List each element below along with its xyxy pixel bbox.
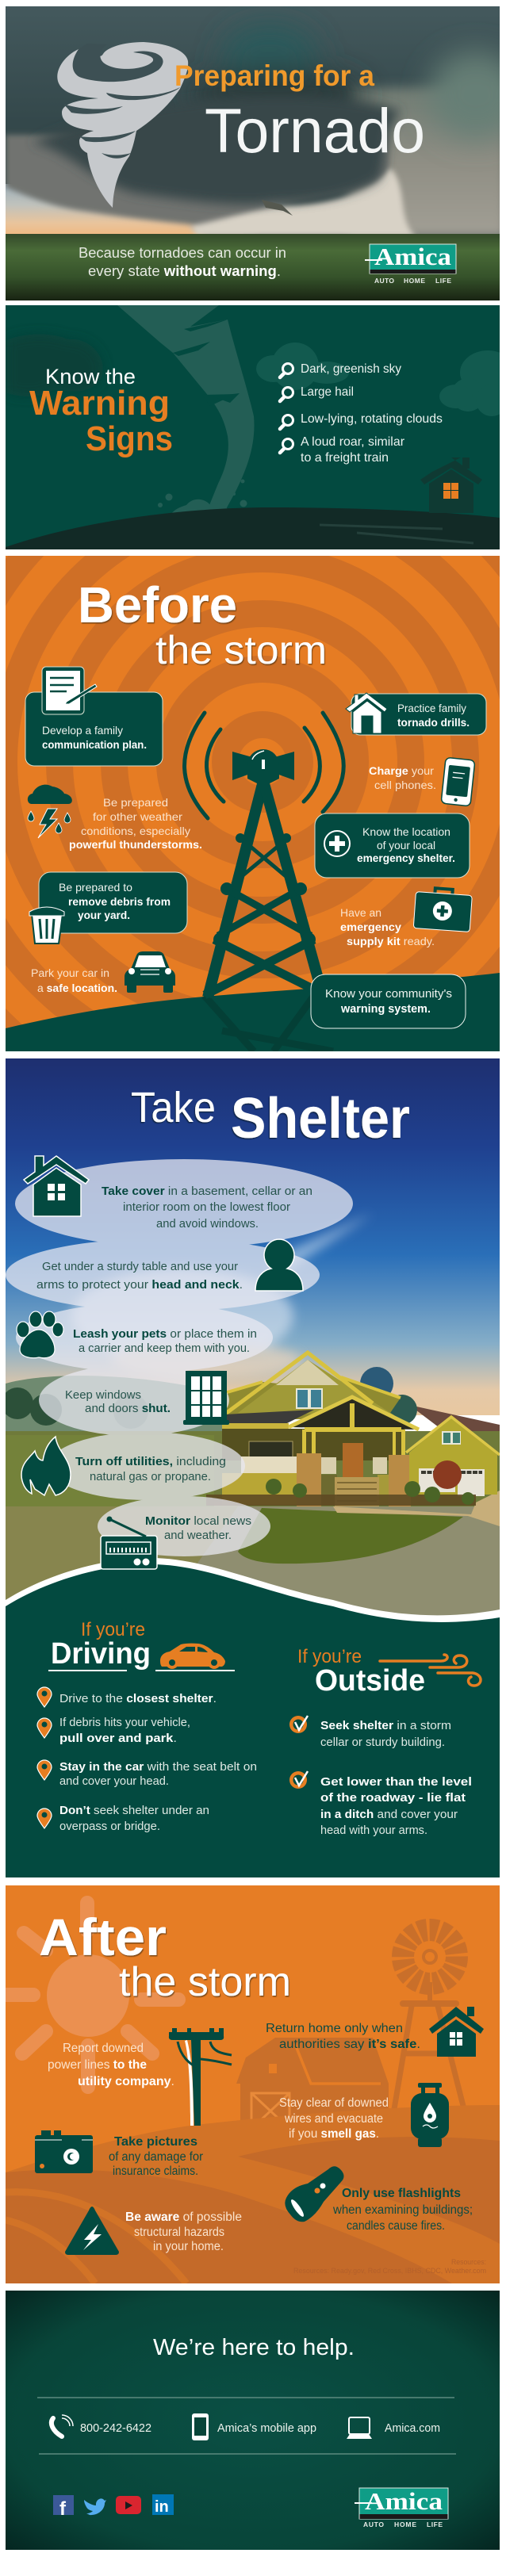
- list: driving tips: overpass or bridge.: [59, 1820, 160, 1833]
- callout: emergency shelter: Know the location: [362, 825, 450, 838]
- list: driving tips: Stay in the car with the seat belt on: [59, 1760, 257, 1774]
- heading: if you're outside: If you’re: [297, 1646, 362, 1667]
- icon: document and pen: [42, 667, 97, 714]
- text: take pictures: insurance claims.: [113, 2165, 198, 2178]
- icon: power pole: [169, 2028, 232, 2126]
- oval text: utilities: Turn off utilities, including: [75, 1455, 226, 1468]
- logo: Amica footer: AUTO: [363, 2520, 384, 2528]
- list: warning signs: [301, 362, 443, 465]
- icon: car: [125, 951, 175, 993]
- logo: Amica footer: Amica: [365, 2487, 443, 2515]
- callout: remove debris: Be prepared to: [59, 881, 132, 894]
- heading: if you're outside: [297, 1646, 425, 1698]
- hillside and trees: [6, 1376, 222, 1431]
- text: thunderstorms: Be prepared: [103, 796, 168, 809]
- callout: communication plan: Develop a family: [42, 724, 123, 737]
- text: emergency kit: emergency: [340, 921, 401, 933]
- icon: flashlight: [285, 2166, 344, 2222]
- text: smell gas: if you smell gas.: [289, 2127, 379, 2141]
- text: charge phones: [369, 764, 436, 791]
- heading: know the warning signs: Warning: [29, 384, 170, 423]
- oval text: take cover: [102, 1185, 312, 1231]
- text: emergency kit: supply kit ready.: [347, 935, 435, 947]
- resources note: [293, 2258, 486, 2275]
- list: driving tips: Drive to the closest shelter .: [59, 1692, 217, 1705]
- resources note: Resources:: [451, 2258, 486, 2266]
- callout: emergency shelter: [315, 813, 470, 878]
- text: return home: [266, 2022, 420, 2051]
- heading: if you're driving: If you’re: [81, 1619, 145, 1640]
- panel: take shelter: [2, 1058, 506, 1877]
- tornado silhouette: [117, 305, 254, 526]
- logo: Amica footer: LIFE: [427, 2520, 443, 2528]
- heading: after the storm: [39, 1908, 291, 2005]
- panel: hero storm photo: [6, 6, 506, 300]
- translucent ovals: [6, 1159, 353, 1556]
- icon: storm cloud: [28, 785, 72, 838]
- heading: here to help: We’re here to help.: [153, 2335, 355, 2360]
- oval text: monitor: [145, 1514, 251, 1542]
- text: emergency kit: [340, 906, 435, 947]
- list: outside tips: in a ditch and cover your: [320, 1808, 458, 1821]
- logo: Amica: Amica: [374, 243, 452, 270]
- icon: house: [429, 2007, 484, 2057]
- oval text: pets: [73, 1327, 257, 1355]
- list: outside tips: of the roadway - lie flat: [320, 1791, 466, 1805]
- subtitle: every state without warning.: [88, 263, 281, 279]
- list: outside tips: [320, 1719, 472, 1837]
- oval text: utilities: [75, 1455, 226, 1483]
- icon: laptop: [347, 2417, 372, 2439]
- text: structural hazards: structural hazards: [134, 2226, 224, 2239]
- callout: warning system: Know your community's: [325, 987, 452, 1001]
- heading: if you're outside: Outside: [315, 1664, 425, 1698]
- text: emergency kit: Have an: [340, 906, 381, 919]
- oval text: utilities: natural gas or propane.: [90, 1470, 211, 1483]
- text: flashlights: candles cause fires.: [347, 2219, 445, 2233]
- title: Tornado: [205, 95, 425, 166]
- sun: [2, 1903, 178, 2087]
- concentric signal rings: [6, 556, 500, 1028]
- oval text: pets: Leash your pets or place them in: [73, 1327, 257, 1341]
- icons: magnifiers: [280, 363, 293, 453]
- logo: Amica: [365, 243, 456, 285]
- heading: take shelter: Take: [131, 1084, 216, 1131]
- logo: Amica: AUTO: [374, 277, 394, 285]
- list: warning signs: Dark, greenish sky: [301, 362, 401, 376]
- text: thunderstorms: conditions, especially: [81, 825, 190, 837]
- icon: person: [255, 1239, 303, 1291]
- icon: youtube: [116, 2496, 141, 2514]
- icon: radio: [101, 1516, 157, 1569]
- text: thunderstorms: powerful thunderstorms.: [69, 838, 202, 851]
- callout: remove debris: your yard.: [78, 909, 130, 921]
- list: driving tips: and cover your head.: [59, 1774, 169, 1788]
- text: structural hazards: Be aware of possible: [125, 2210, 242, 2224]
- barn: [236, 2038, 389, 2120]
- list: driving tips: [59, 1692, 257, 1833]
- text: take pictures: of any damage for: [109, 2150, 203, 2164]
- sky: [6, 1058, 500, 1415]
- logo: Amica: LIFE: [435, 277, 451, 285]
- text: take pictures: Take pictures: [114, 2135, 197, 2149]
- resources note: Resources: Ready.gov, Red Cross, IBHS, CDC, Weather.com: [293, 2267, 486, 2275]
- logo: Amica: HOME: [404, 277, 425, 285]
- panel: warning signs: [6, 305, 506, 549]
- ground: [6, 973, 500, 1051]
- icon: linkedin: in: [155, 2498, 169, 2516]
- callout: tornado drills: tornado drills.: [397, 716, 470, 729]
- oval text: head and neck: arms to protect your head and neck .: [36, 1278, 243, 1292]
- list: outside tips: Seek shelter in a storm: [320, 1719, 451, 1732]
- icon: flame: [21, 1437, 71, 1495]
- text: thunderstorms: [69, 796, 202, 851]
- icon: wind: [380, 1655, 481, 1686]
- text: structural hazards: [125, 2210, 242, 2253]
- grass and road: [6, 1431, 500, 1506]
- ground hill: [6, 507, 500, 549]
- text: flashlights: [332, 2187, 473, 2233]
- icon: tornado swirl: [57, 42, 188, 208]
- icon: phone: [441, 757, 475, 806]
- heading: if you're driving: [48, 1619, 235, 1671]
- icon: first aid kit: [413, 887, 473, 932]
- title: Preparing for a: [174, 59, 374, 92]
- list: outside tips: cellar or sturdy building.: [320, 1736, 445, 1749]
- list: outside tips: head with your arms.: [320, 1824, 427, 1837]
- heading: know the warning signs: Know the: [45, 365, 136, 389]
- icon: trash can: [29, 907, 64, 944]
- list: warning signs: Low-lying, rotating clouds: [301, 412, 443, 426]
- callout: communication plan: communication plan.: [42, 738, 147, 751]
- icon: propane tank: [411, 2083, 449, 2147]
- text: charge phones: Charge your: [369, 764, 434, 777]
- text: return home: authorities say it’s safe .: [279, 2038, 420, 2051]
- oval text: windows: [65, 1388, 171, 1415]
- panel: contact footer: [6, 2291, 500, 2550]
- text: thunderstorms: for other weather: [93, 810, 182, 823]
- text: flashlights: Only use flashlights: [342, 2187, 461, 2200]
- logo: Amica footer: HOME: [394, 2520, 416, 2528]
- list: warning signs: Large hail: [301, 385, 354, 399]
- icon: facebook: f: [59, 2498, 67, 2520]
- heading: after the storm: the storm: [119, 1959, 291, 2005]
- text: structural hazards: in your home.: [153, 2240, 224, 2253]
- contact: mobile app: Amica’s mobile app: [217, 2421, 316, 2435]
- subtitle: [79, 245, 286, 279]
- icon: mobile: [192, 2413, 209, 2440]
- callout: remove debris: [29, 872, 187, 944]
- callout: tornado drills: Practice family: [397, 702, 466, 714]
- list: outside tips: Get lower than the level: [320, 1775, 472, 1789]
- clouds: [256, 343, 506, 416]
- text: charge phones: cell phones.: [374, 779, 436, 791]
- icon: camera: [35, 2130, 93, 2173]
- subtitle: Because tornadoes can occur in: [79, 245, 286, 261]
- heading: take shelter: Shelter: [231, 1087, 410, 1150]
- icon: green house: [24, 1156, 89, 1216]
- text: return home: Return home only when: [266, 2022, 403, 2035]
- hills: [6, 2105, 500, 2283]
- text: power lines: power lines to the: [48, 2058, 147, 2072]
- text: take pictures: [109, 2135, 203, 2178]
- text: power lines: utility company.: [78, 2075, 174, 2088]
- oval text: take cover: interior room on the lowest floor: [123, 1200, 290, 1214]
- heading: before the storm: Before: [78, 576, 237, 633]
- text: smell gas: [279, 2096, 389, 2141]
- icon: hazard triangle: [65, 2207, 119, 2255]
- icon: white house: [346, 693, 387, 733]
- icon: house silhouette: [420, 457, 482, 513]
- heading: before the storm: the storm: [155, 628, 327, 672]
- callout: tornado drills: [346, 693, 486, 735]
- text: park car: [31, 966, 117, 994]
- oval text: take cover: and avoid windows.: [156, 1217, 259, 1231]
- list: driving tips: Don’t seek shelter under an: [59, 1804, 209, 1817]
- callout: emergency shelter: emergency shelter.: [357, 852, 455, 864]
- driving and outside background wave: [6, 1558, 500, 1877]
- text: park car: a safe location.: [37, 982, 117, 994]
- text: power lines: [48, 2042, 174, 2088]
- text: park car: Park your car in: [31, 966, 109, 979]
- heading: before the storm: [78, 576, 327, 672]
- list: warning signs: to a freight train: [301, 451, 389, 465]
- icon: facebook: [53, 2495, 74, 2520]
- heading: after the storm: After: [39, 1908, 167, 1966]
- list: driving tips: pull over and park .: [59, 1732, 177, 1745]
- icons: map pins: [37, 1687, 52, 1828]
- oval text: monitor: Monitor local news: [145, 1514, 251, 1528]
- signal tower: [185, 713, 343, 997]
- logo: Amica footer: [355, 2487, 448, 2528]
- list: driving tips: If debris hits your vehicle,: [59, 1716, 190, 1729]
- oval text: monitor: and weather.: [164, 1529, 232, 1542]
- oval text: head and neck: Get under a sturdy table and use your: [42, 1260, 238, 1273]
- title: [174, 59, 425, 166]
- callout: emergency shelter: of your local: [377, 839, 435, 852]
- oval text: pets: a carrier and keep them with you.: [79, 1342, 250, 1355]
- text: smell gas: wires and evacuate: [284, 2112, 383, 2126]
- contact: website: Amica.com: [385, 2421, 440, 2435]
- icon: paw print: [17, 1311, 63, 1358]
- icons: check marks: [289, 1716, 308, 1789]
- icon: plus circle: [324, 831, 350, 856]
- heading: know the warning signs: [29, 365, 173, 458]
- windmill: [394, 1930, 464, 2109]
- house: [206, 1353, 500, 1506]
- panel: after the storm: [2, 1885, 500, 2283]
- heading: take shelter: [131, 1084, 410, 1150]
- text: power lines: Report downed: [63, 2042, 144, 2055]
- text: flashlights: when examining buildings;: [332, 2203, 473, 2217]
- callout: warning system: [311, 974, 466, 1028]
- icon: orange car: [160, 1644, 225, 1669]
- callout: warning system: warning system.: [340, 1002, 431, 1016]
- contact: phone: 800-242-6422: [80, 2421, 151, 2435]
- icon: window: [183, 1371, 229, 1425]
- icon: phone handset: [52, 2415, 73, 2436]
- heading: if you're driving: Driving: [51, 1637, 151, 1671]
- callout: remove debris: remove debris from: [68, 895, 171, 908]
- panel: before the storm: [6, 556, 500, 1051]
- oval text: windows: Keep windows: [65, 1388, 141, 1402]
- text: smell gas: Stay clear of downed: [279, 2096, 389, 2110]
- callout: communication plan: [25, 667, 163, 766]
- list: warning signs: A loud roar, similar: [301, 435, 405, 449]
- oval text: windows: and doors shut.: [85, 1402, 171, 1415]
- icon: linkedin: [152, 2494, 174, 2516]
- oval text: take cover: Take cover in a basement, cellar or an: [102, 1185, 312, 1198]
- oval text: head and neck: [36, 1260, 243, 1292]
- icon: twitter: [84, 2498, 106, 2515]
- heading: know the warning signs: Signs: [86, 419, 173, 458]
